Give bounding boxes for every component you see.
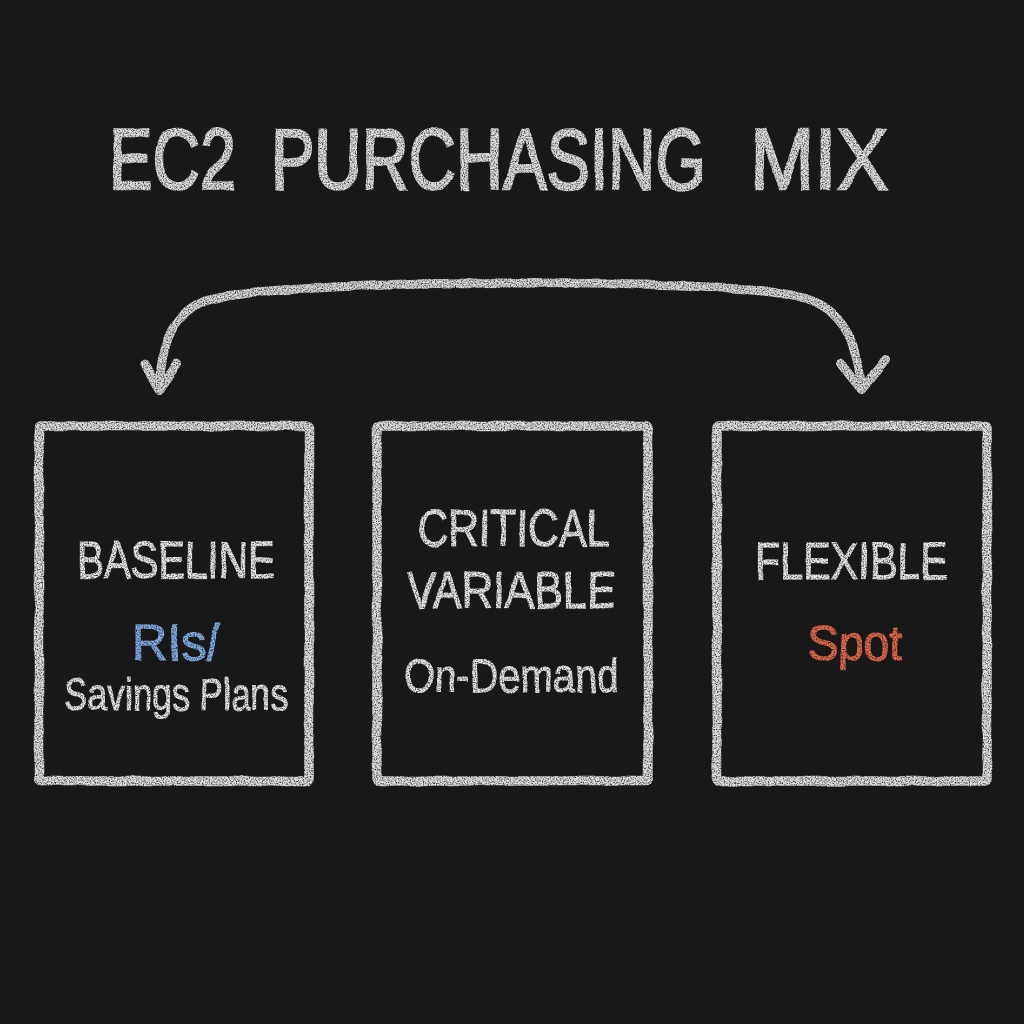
critical variable box outline [377,426,648,781]
title: MIX [750,112,888,208]
variable heading line: VARIABLE [407,562,616,620]
flexible heading: FLEXIBLE [755,533,948,591]
panel: baseline [39,426,309,781]
savings plans label: Savings Plans [64,669,288,720]
critical heading line: CRITICAL [418,500,610,558]
flexible box outline [717,426,987,781]
baseline heading: BASELINE [77,532,275,590]
arrow: curved double-headed arrow linking baseline and flexible [145,283,886,390]
spot label in red: Spot [808,617,902,671]
on-demand label: On-Demand [404,649,619,702]
baseline box outline [39,426,309,781]
title: PURCHASING [271,112,706,208]
RIs label in blue: RIs/ [132,614,221,671]
title: EC2 [109,112,236,208]
panel: critical variable [377,426,648,781]
panel: flexible [717,426,987,781]
